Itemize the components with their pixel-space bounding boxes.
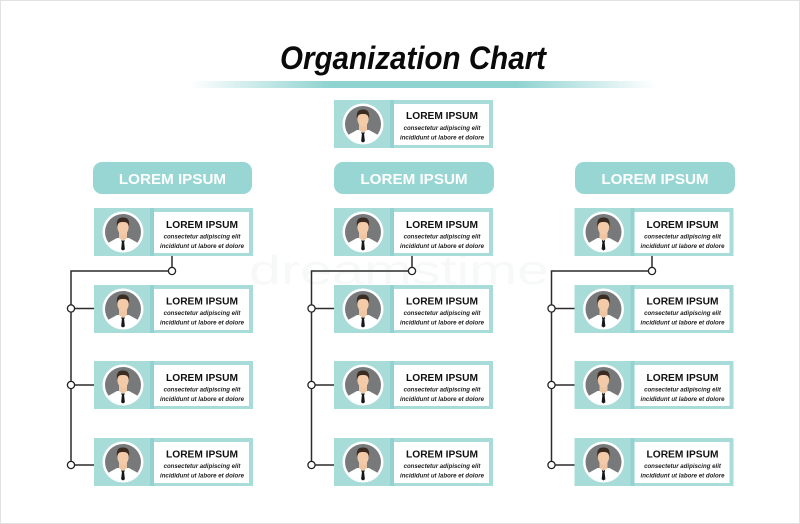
column 2 card 2: incididunt ut labore et dolore [400,320,485,326]
column 3 card 4 [574,438,734,486]
column 3 card 3 [574,361,734,409]
column 2 card 1: incididunt ut labore et dolore [400,243,485,250]
column 1 heading [93,162,252,194]
column 2 heading: LOREM IPSUM [360,171,468,188]
column 1 card 2: LOREM IPSUM [166,296,238,308]
column 3 card 2: incididunt ut labore et dolore [641,320,725,326]
top card: consectetur adipiscing elit [404,125,481,132]
column 1 card 1 [94,208,253,256]
column 1 card 3: incididunt ut labore et dolore [160,396,245,403]
column 1 card 2: consectetur adipiscing elit [164,310,241,317]
column 2 heading [334,162,494,194]
column 2 card 4: consectetur adipiscing elit [404,463,481,470]
column 2 card 3: consectetur adipiscing elit [404,386,481,394]
column 3 card 1 [574,208,734,256]
column 2 card 2 [334,285,493,333]
column 2 card 2: LOREM IPSUM [406,296,478,308]
column 2 card 1: LOREM IPSUM [406,220,478,231]
column 3 card 4: incididunt ut labore et dolore [641,472,725,480]
column 3 heading: LOREM IPSUM [601,171,709,188]
column 1 card 2: incididunt ut labore et dolore [160,320,245,326]
column 3 card 1: LOREM IPSUM [647,220,718,231]
column 2 card 4: LOREM IPSUM [406,450,478,460]
column 3 heading [575,162,735,194]
top card: incididunt ut labore et dolore [400,134,485,142]
column 1 card 4 [94,438,253,486]
top card: LOREM IPSUM [406,111,478,122]
column 3 connector [548,256,656,469]
watermark: dreamstime [249,247,549,293]
column 1 heading: LOREM IPSUM [119,171,226,188]
column 2 card 3: incididunt ut labore et dolore [400,396,485,403]
column 3 [548,162,735,486]
column 2 card 1: consectetur adipiscing elit [404,234,481,240]
title: Organization Chart [280,40,547,76]
column 1 card 1: consectetur adipiscing elit [164,234,241,240]
column 3 card 4: consectetur adipiscing elit [644,463,722,470]
column 1 card 1: incididunt ut labore et dolore [160,243,245,250]
column 1 card 4: consectetur adipiscing elit [164,463,241,470]
column 2 card 3 [334,361,493,409]
column 3 card 4: LOREM IPSUM [647,450,718,460]
column 2 card 2: consectetur adipiscing elit [404,310,481,317]
column 1 connector [67,256,176,469]
column 2 connector [308,256,416,469]
column 1 card 2 [94,285,253,333]
column 1 card 1: LOREM IPSUM [166,220,238,231]
column 3 card 2: LOREM IPSUM [647,296,718,308]
column 2 [308,162,494,486]
column 1 card 3: consectetur adipiscing elit [164,386,241,394]
column 2 card 4 [334,438,493,486]
column 2 card 4: incididunt ut labore et dolore [400,472,485,480]
column 3 card 3: LOREM IPSUM [647,373,718,384]
column 1 card 3: LOREM IPSUM [166,373,238,384]
column 3 card 2: consectetur adipiscing elit [644,310,722,317]
column 3 card 3: incididunt ut labore et dolore [641,396,725,403]
column 3 card 1: incididunt ut labore et dolore [641,243,725,250]
top card [334,100,493,148]
title underline [190,81,656,88]
column 3 card 3: consectetur adipiscing elit [644,386,722,394]
column 1 card 4: incididunt ut labore et dolore [160,472,245,480]
column 1 [67,162,253,486]
column 2 card 1 [334,208,493,256]
column 2 card 3: LOREM IPSUM [406,373,478,384]
column 3 card 1: consectetur adipiscing elit [644,234,722,240]
column 1 card 4: LOREM IPSUM [166,450,238,460]
column 3 card 2 [574,285,734,333]
column 1 card 3 [94,361,253,409]
